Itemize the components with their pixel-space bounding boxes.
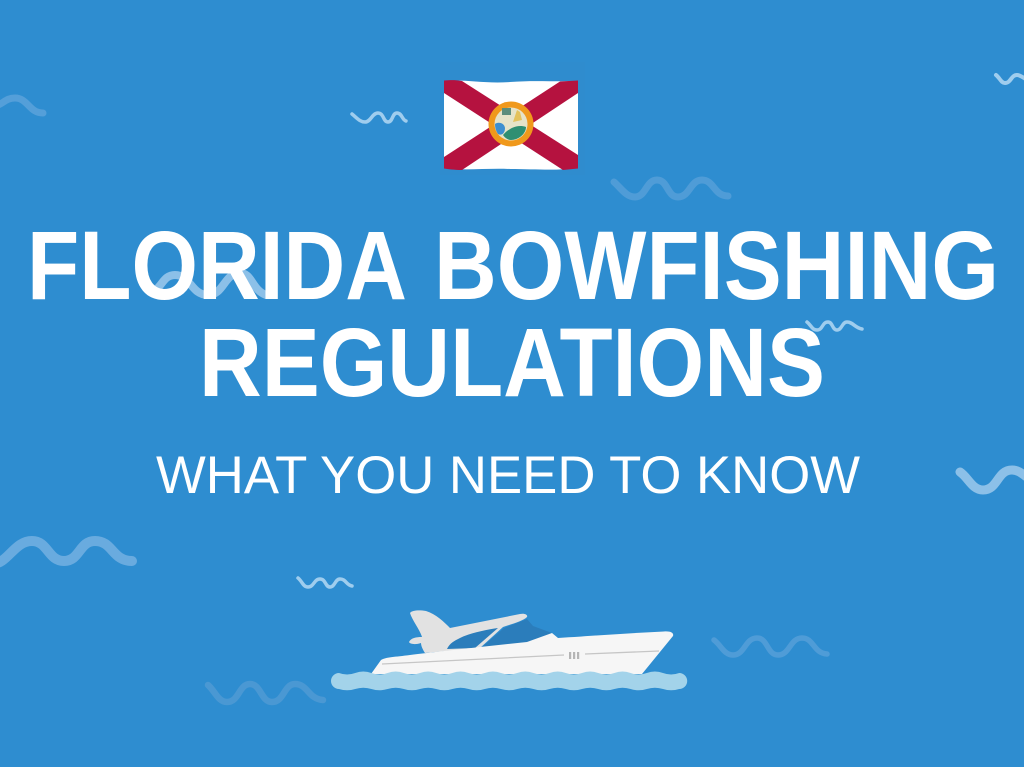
boat windows bbox=[447, 619, 552, 649]
title: REGULATIONS bbox=[199, 308, 825, 417]
title: FLORIDA bbox=[27, 211, 407, 320]
icon: boat bbox=[331, 610, 687, 690]
water bbox=[331, 672, 687, 690]
boat hull bbox=[371, 631, 673, 674]
icon: Florida flag bbox=[440, 62, 585, 175]
title bbox=[27, 211, 999, 417]
boat superstructure bbox=[409, 610, 527, 653]
icon: state seal bbox=[488, 102, 534, 146]
subtitle: WHAT YOU NEED TO KNOW bbox=[156, 446, 860, 505]
boat stripe bbox=[382, 651, 659, 664]
